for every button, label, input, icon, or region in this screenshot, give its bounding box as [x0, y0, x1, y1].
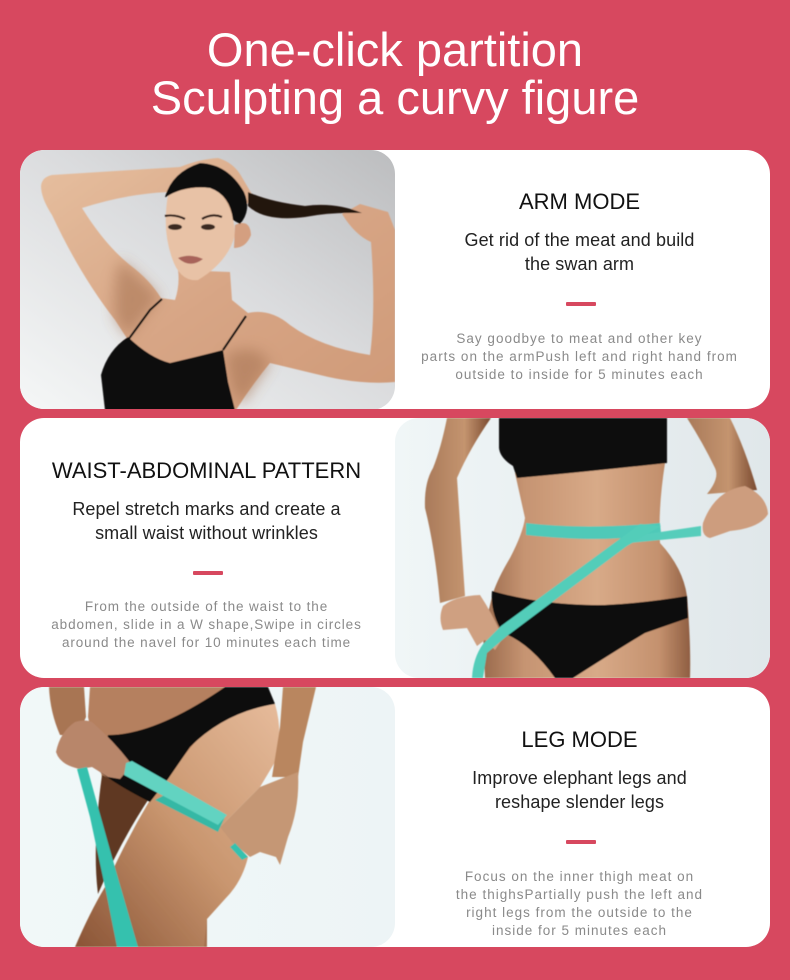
subheading: Improve elephant legs and [472, 768, 687, 788]
heading: ARM MODE [519, 189, 640, 214]
description: parts on the armPush left and right hand from [421, 349, 738, 364]
subheading: reshape slender legs [495, 792, 664, 812]
photo: thigh with measuring tape [20, 687, 395, 947]
subheading: Repel stretch marks and create a [72, 499, 341, 519]
description: the thighsPartially push the left and [456, 887, 703, 902]
description [421, 331, 738, 382]
subheading [72, 499, 341, 543]
subheading: the swan arm [525, 254, 634, 274]
text block: leg mode [456, 727, 703, 938]
title: One-click partition [207, 23, 583, 76]
panel: leg mode [20, 687, 770, 947]
subheading: small waist without wrinkles [95, 523, 318, 543]
photo: waist with measuring tape [395, 418, 770, 678]
divider bar [566, 302, 596, 306]
subheading: Get rid of the meat and build [464, 230, 695, 250]
description: abdomen, slide in a W shape,Swipe in circles [51, 617, 362, 632]
description: outside to inside for 5 minutes each [455, 367, 704, 382]
description [51, 599, 362, 650]
description: around the navel for 10 minutes each time [62, 635, 351, 650]
description: From the outside of the waist to the [85, 599, 328, 614]
heading: WAIST-ABDOMINAL PATTERN [52, 458, 361, 483]
subheading [464, 230, 695, 274]
text block: arm mode [421, 189, 738, 382]
panel: waist-abdominal pattern [20, 418, 770, 678]
description: Focus on the inner thigh meat on [465, 869, 694, 884]
description: Say goodbye to meat and other key [456, 331, 703, 346]
divider bar [193, 571, 223, 575]
text block: waist-abdominal [51, 458, 362, 650]
subheading [472, 768, 687, 812]
heading: LEG MODE [521, 727, 638, 752]
title [151, 23, 639, 124]
photo: woman holding ponytail, arm raised [20, 150, 395, 409]
description: inside for 5 minutes each [492, 923, 667, 938]
panel: arm mode [20, 150, 770, 409]
description [456, 869, 703, 938]
title: Sculpting a curvy figure [151, 71, 639, 124]
description: right legs from the outside to the [466, 905, 693, 920]
divider bar [566, 840, 596, 844]
